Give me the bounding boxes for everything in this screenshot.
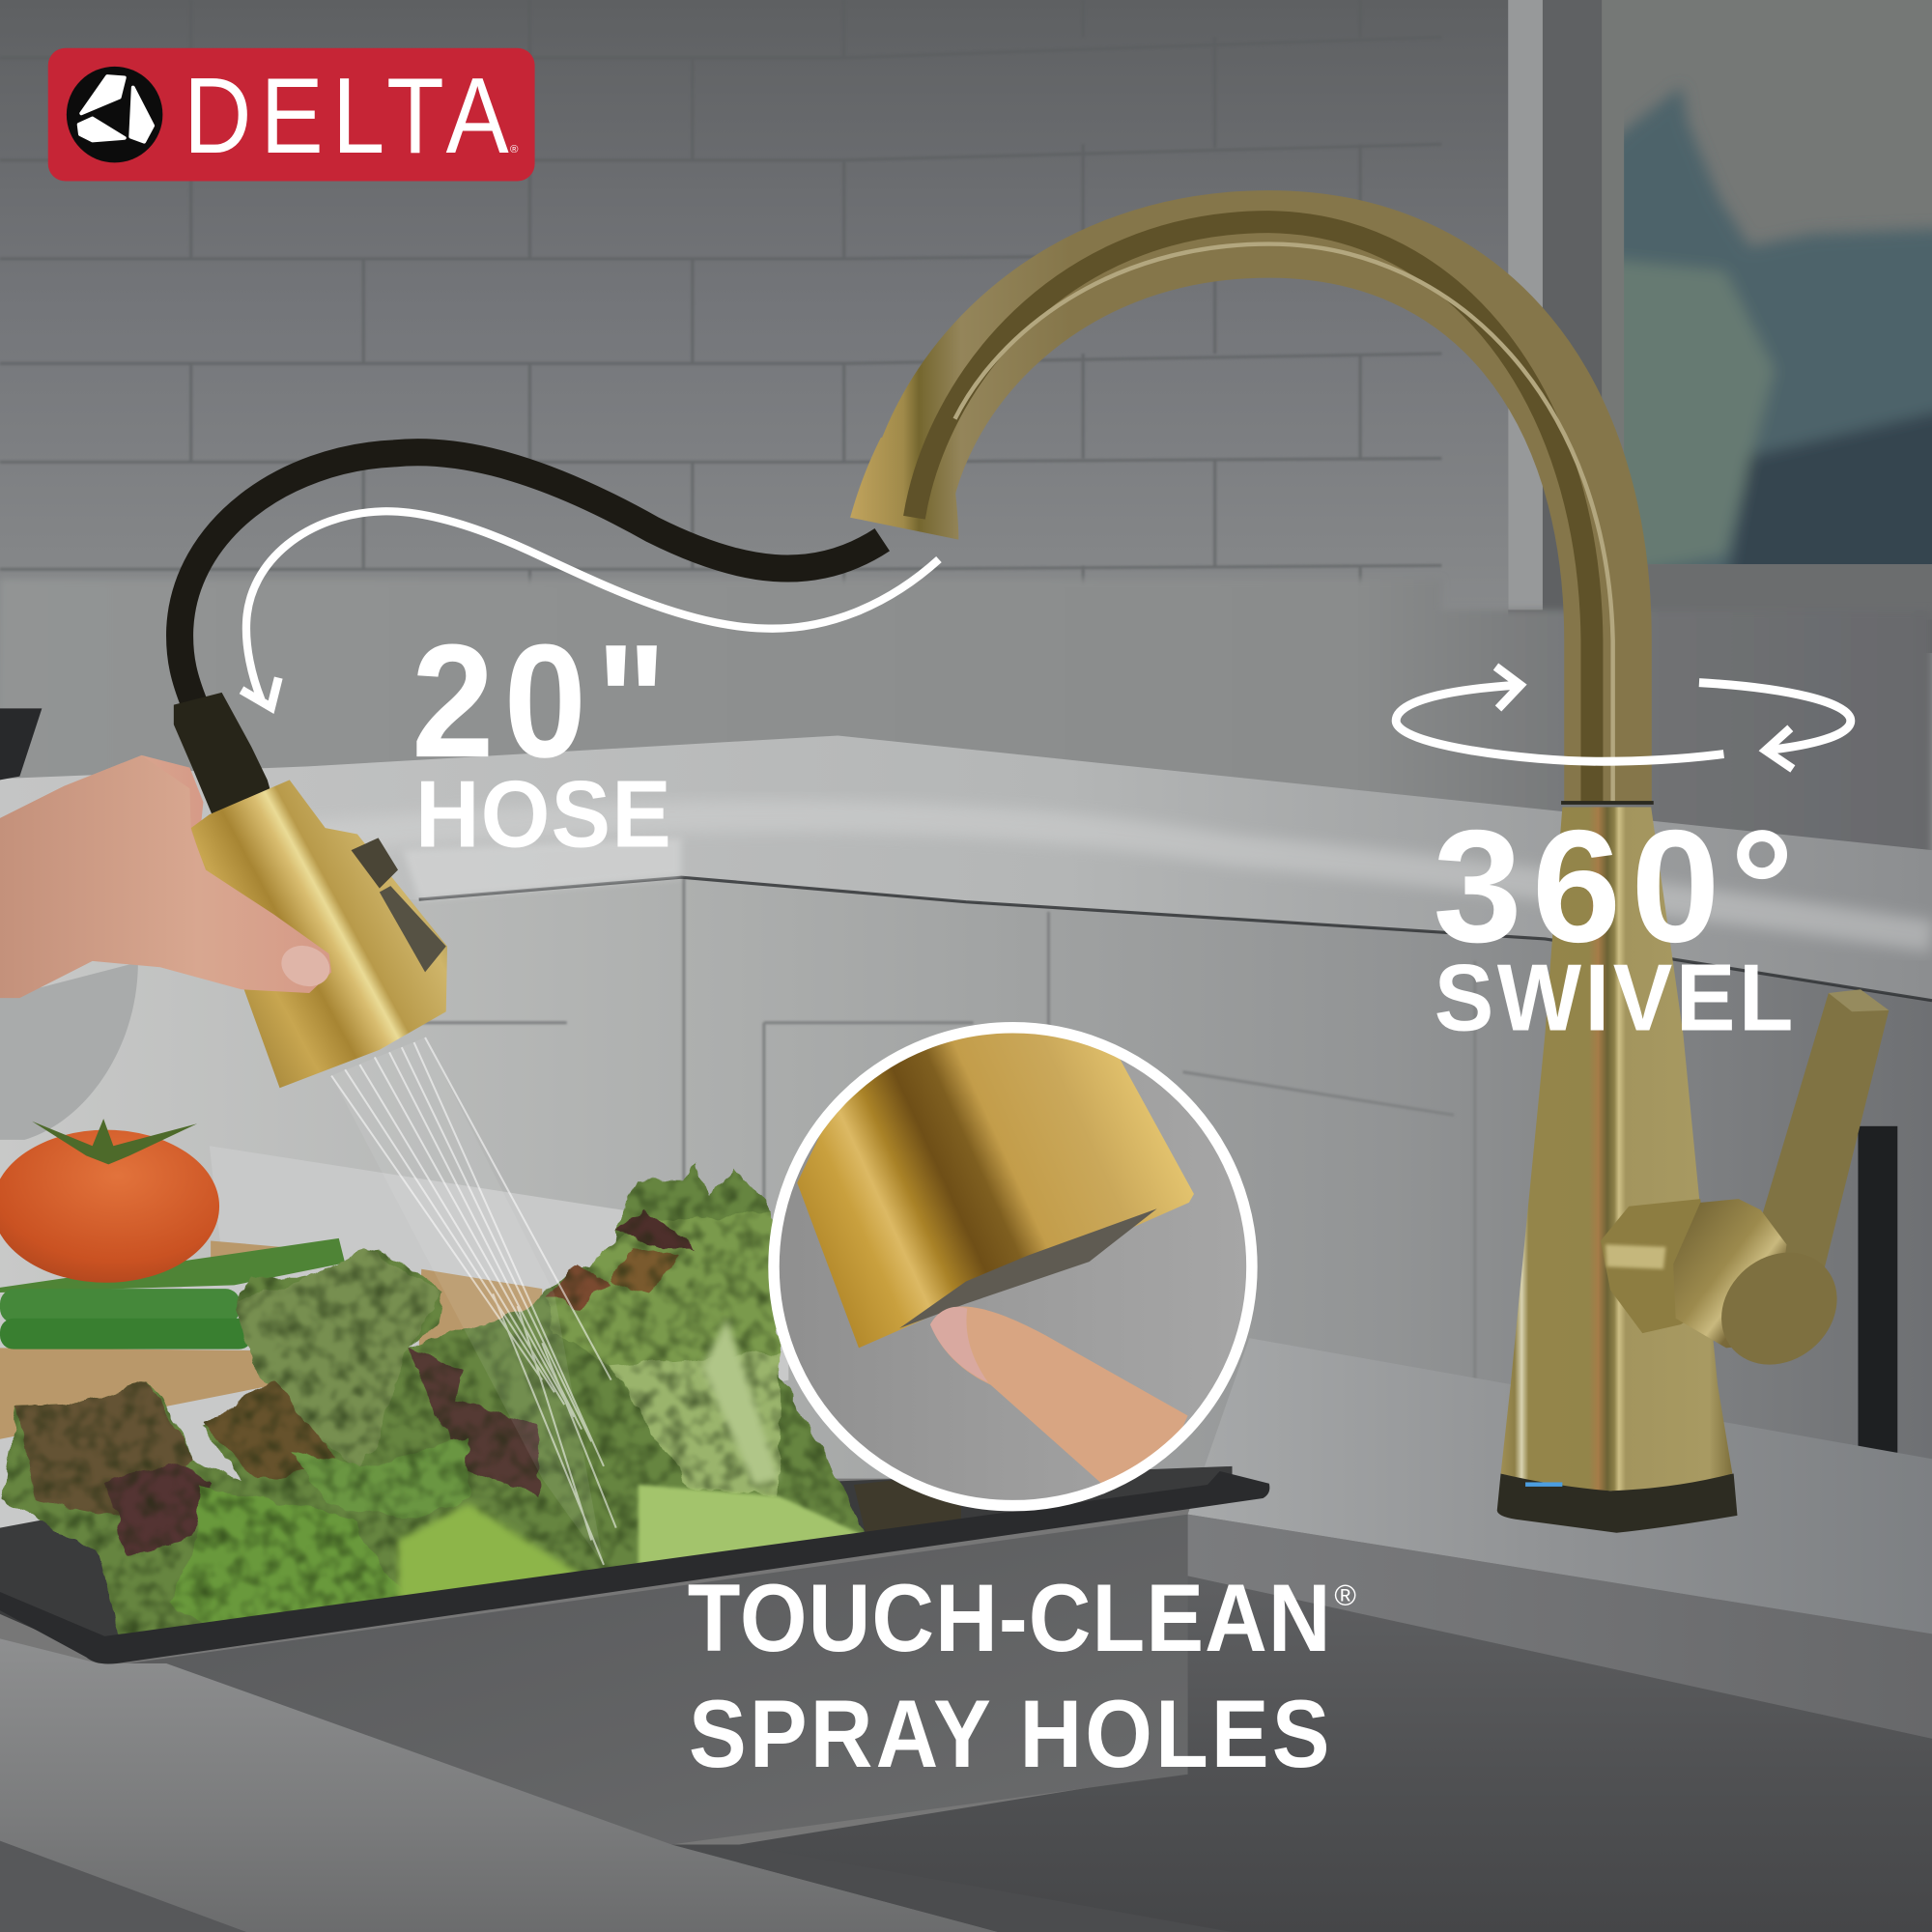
spout dark reflection <box>914 222 1592 804</box>
fingernail <box>275 939 335 993</box>
back counter near sink <box>0 1146 788 1540</box>
front right countertop top <box>1188 1338 1932 1634</box>
faucet base <box>1497 1474 1737 1533</box>
gold sprayer close-up <box>797 1016 1194 1348</box>
spout highlight <box>955 244 1613 804</box>
sink inner face <box>111 1515 1188 1844</box>
sprayer head <box>174 693 447 1088</box>
logo mark <box>67 67 162 162</box>
cabinet handle <box>1858 1126 1897 1453</box>
hand front with finger <box>0 755 331 998</box>
swivel joint <box>1561 801 1654 805</box>
registered mark: ® <box>510 144 519 156</box>
lever handle <box>1749 993 1889 1282</box>
lower counter side <box>739 1576 1932 1932</box>
faucet body <box>1501 807 1732 1491</box>
cabinets <box>0 863 1932 1479</box>
glass bowl <box>0 962 138 1140</box>
trees outside window <box>1624 87 1932 564</box>
water spray <box>331 1037 616 1565</box>
spout tip <box>850 438 958 540</box>
sprayer body <box>191 780 447 1088</box>
hose <box>180 452 882 705</box>
registered mark: ® <box>1334 1579 1356 1612</box>
front right counter edge <box>1188 1515 1932 1739</box>
hand back <box>0 755 203 998</box>
spout tube <box>906 234 1608 804</box>
logo: Delta <box>48 48 535 181</box>
swivel label: SWIVEL <box>1435 946 1793 1051</box>
scallions <box>0 1238 345 1350</box>
window <box>1508 0 1932 653</box>
hose length label: 20" <box>412 611 667 792</box>
tile joints <box>0 0 1441 631</box>
back backsplash <box>0 579 1932 863</box>
sink opening <box>0 1466 1233 1658</box>
tomato <box>0 1119 219 1283</box>
handle collar <box>1601 1199 1713 1333</box>
spray holes <box>899 1208 1157 1328</box>
touch LED <box>1525 1482 1562 1487</box>
lettuce <box>3 1163 961 1636</box>
handle cylinder <box>1673 1199 1786 1348</box>
black bowl on back counter <box>0 708 42 780</box>
hose label: HOSE <box>415 762 671 867</box>
handle cap <box>1699 1230 1860 1388</box>
hose arrow <box>242 511 939 707</box>
swivel degree label: 360° <box>1433 797 1794 976</box>
back countertop <box>0 735 1932 1001</box>
hose connector <box>174 693 270 814</box>
faucet <box>850 222 1889 1533</box>
fingertip <box>930 1306 1188 1483</box>
magnified circle callout <box>774 1016 1252 1509</box>
sink rim <box>0 1471 1269 1664</box>
swivel arrows <box>1396 667 1851 769</box>
front left counter <box>0 1638 998 1932</box>
background: kitchen wall <box>0 0 1932 887</box>
cutting board <box>0 1240 542 1439</box>
spray holes heading: SPRAY HOLES <box>689 1681 1330 1788</box>
sprayer buttons <box>352 838 398 889</box>
logo wordmark: DELTA <box>184 56 509 177</box>
nail <box>930 1307 988 1382</box>
touch-clean heading: TOUCH-CLEAN <box>688 1565 1331 1672</box>
